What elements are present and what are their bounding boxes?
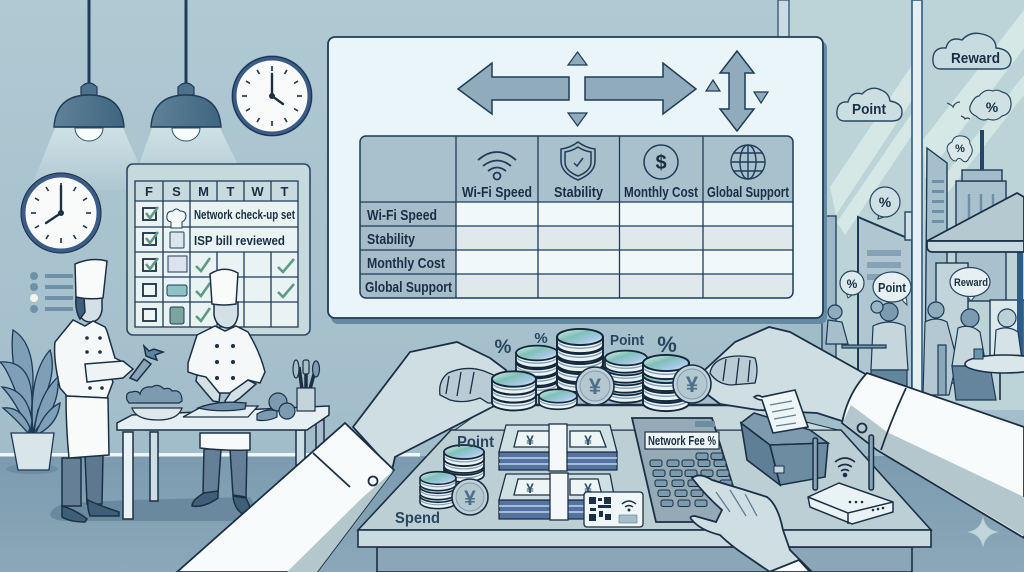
printer top — [741, 413, 828, 445]
plant — [0, 330, 60, 474]
chef right legs — [192, 449, 250, 515]
floating labels above coins — [495, 330, 677, 358]
small legend list — [30, 272, 73, 313]
wall strip under panel — [780, 318, 834, 458]
chef right jacket — [188, 326, 265, 393]
right cuff button — [858, 424, 866, 432]
left coin stacks — [420, 445, 484, 509]
chef right hat — [210, 269, 238, 305]
panel: comparison matrix — [328, 37, 827, 324]
icon: wifi — [478, 152, 516, 180]
floating labels above coins: % — [657, 332, 677, 357]
column headers: Wi-Fi Speed — [462, 184, 532, 201]
icon: dollar — [644, 145, 678, 179]
floating labels above coins: Point — [610, 332, 644, 349]
table grid — [360, 136, 793, 298]
cash stack lower: ¥ — [584, 480, 592, 496]
printer body left side — [741, 423, 780, 485]
calendar header days: M — [198, 184, 209, 199]
lamp 1 — [54, 0, 124, 141]
finger creases — [716, 490, 757, 516]
vegetable bowl — [127, 385, 182, 420]
calculator — [632, 418, 744, 522]
cash stack lower: ¥ — [526, 480, 534, 496]
row headers: Global Support — [365, 279, 452, 296]
cash stack upper: ¥ — [584, 432, 592, 448]
chef left apron — [66, 396, 109, 458]
chef left face — [78, 296, 102, 322]
bubble: Reward: Reward — [954, 277, 988, 289]
chef left — [55, 260, 163, 522]
right cuff seam — [881, 388, 906, 450]
cloud: Reward: Reward — [951, 50, 1000, 67]
coin: yen centre — [576, 367, 614, 405]
row headers: Wi-Fi Speed — [367, 207, 437, 224]
column headers — [462, 184, 789, 201]
vegetables right — [257, 393, 295, 421]
desk — [358, 405, 931, 572]
chopping board — [183, 402, 258, 417]
QR payment card — [584, 492, 643, 527]
bubble: percent small — [840, 271, 864, 298]
utensil jar — [293, 360, 320, 411]
calendar header days: F — [145, 184, 153, 199]
cash stack upper: ¥ — [526, 432, 534, 448]
chef left hat — [75, 260, 107, 299]
left knuckles — [446, 372, 474, 396]
calendar header days: T — [227, 184, 235, 199]
watermark sparkle — [967, 516, 999, 548]
window frame centre — [912, 0, 922, 400]
printer front — [770, 443, 828, 485]
lamp 2 — [151, 0, 221, 141]
arrow: left — [458, 63, 569, 114]
bubble: percent — [870, 187, 900, 219]
coin: yen desk: ¥ — [464, 487, 476, 510]
cafe table — [965, 349, 1024, 400]
checkboxes — [143, 208, 156, 321]
birds — [947, 102, 970, 119]
chef left jacket — [55, 320, 125, 398]
right sleeve — [842, 373, 1024, 538]
left sleeve — [177, 423, 394, 572]
coin stacks on shelf — [492, 329, 689, 411]
column headers: Monthly Cost — [624, 184, 698, 201]
cafe people — [826, 301, 1022, 400]
calendar board — [127, 164, 310, 335]
coin: yen right: ¥ — [686, 372, 699, 397]
right sleeve shadow — [843, 405, 1024, 536]
coin: yen right — [673, 365, 711, 403]
window frame left — [778, 0, 789, 40]
arrow: right — [585, 63, 696, 114]
bubble: Point: Point — [878, 280, 907, 295]
chef right buttons — [215, 344, 235, 380]
left cuff seam — [313, 453, 350, 487]
window: sky — [788, 0, 1024, 410]
city right pane — [925, 130, 1024, 385]
calendar header days: W — [251, 184, 264, 199]
label: Point: Point — [457, 434, 495, 451]
floor — [0, 456, 1024, 572]
icon: dollar: $ — [655, 152, 667, 174]
right hand — [696, 327, 867, 422]
chef left forearm — [85, 361, 133, 382]
calculator keys — [650, 453, 732, 506]
small triangles — [568, 52, 768, 126]
calendar header days — [145, 184, 289, 199]
baseboard — [0, 453, 420, 456]
calendar entry: ISP bill: ISP bill reviewed — [194, 233, 285, 248]
row headers — [365, 207, 452, 296]
clock upper — [232, 56, 312, 136]
chef right hands — [196, 375, 256, 406]
bubble: percent: % — [879, 194, 892, 210]
right fist — [710, 356, 757, 385]
receipt printer — [741, 390, 828, 485]
wifi icon at router — [835, 458, 855, 476]
city left pane — [822, 212, 912, 400]
cloud: percent — [970, 90, 1011, 120]
coin: yen centre: ¥ — [589, 374, 602, 399]
coin: yen desk — [452, 479, 488, 515]
calendar small icons — [167, 209, 187, 324]
floating labels above coins: % — [534, 330, 548, 347]
row headers: Stability — [367, 231, 416, 248]
cloud: Point — [837, 88, 902, 121]
bubble: Reward — [950, 268, 990, 301]
right knuckles — [723, 358, 750, 384]
smoke cloud: percent: % — [955, 143, 965, 155]
floating labels above coins: % — [495, 337, 512, 358]
icon: globe — [731, 145, 765, 179]
cash stack upper — [499, 424, 617, 471]
calendar header days: S — [172, 184, 181, 199]
column headers: Stability — [554, 184, 604, 201]
label: Spend: Spend — [395, 510, 440, 527]
bubble: Point — [873, 272, 911, 305]
chef right — [188, 269, 265, 515]
bottom hand — [691, 475, 812, 572]
chef left shoes and legs — [62, 455, 119, 522]
left cuff button — [368, 476, 378, 486]
wall background — [0, 0, 1024, 456]
chef left carrot — [130, 359, 151, 381]
chef left hair — [76, 297, 85, 319]
floor shadow — [50, 497, 260, 521]
bottom cuff — [769, 560, 810, 572]
column headers: Global Support — [707, 184, 789, 201]
icon: shield — [561, 142, 595, 180]
left sleeve shadow — [287, 470, 394, 572]
chef right face — [214, 302, 238, 328]
chef right apron — [200, 433, 250, 450]
calendar header days: T — [281, 184, 289, 199]
calculator display: Network Fee % — [648, 433, 716, 448]
cash stack lower — [499, 473, 615, 520]
left hand — [177, 342, 506, 572]
left fist — [440, 368, 500, 403]
bubble: percent small: % — [847, 277, 858, 291]
receipt paper — [754, 390, 808, 433]
cloud: Reward — [933, 33, 1011, 69]
cloud: percent: % — [986, 99, 999, 115]
calendar entry: network check-up: Network check-up set — [194, 207, 296, 222]
smoke cloud: percent — [947, 136, 972, 162]
cloud: Point: Point — [852, 101, 886, 118]
arrow: vertical double — [720, 51, 754, 131]
check marks — [146, 207, 294, 321]
light cones — [30, 128, 250, 190]
clock lower — [21, 173, 101, 253]
cafe umbrella — [927, 193, 1024, 362]
router — [808, 435, 893, 524]
kitchen table — [117, 406, 329, 519]
chef left buttons — [85, 336, 104, 390]
row headers: Monthly Cost — [367, 255, 445, 272]
